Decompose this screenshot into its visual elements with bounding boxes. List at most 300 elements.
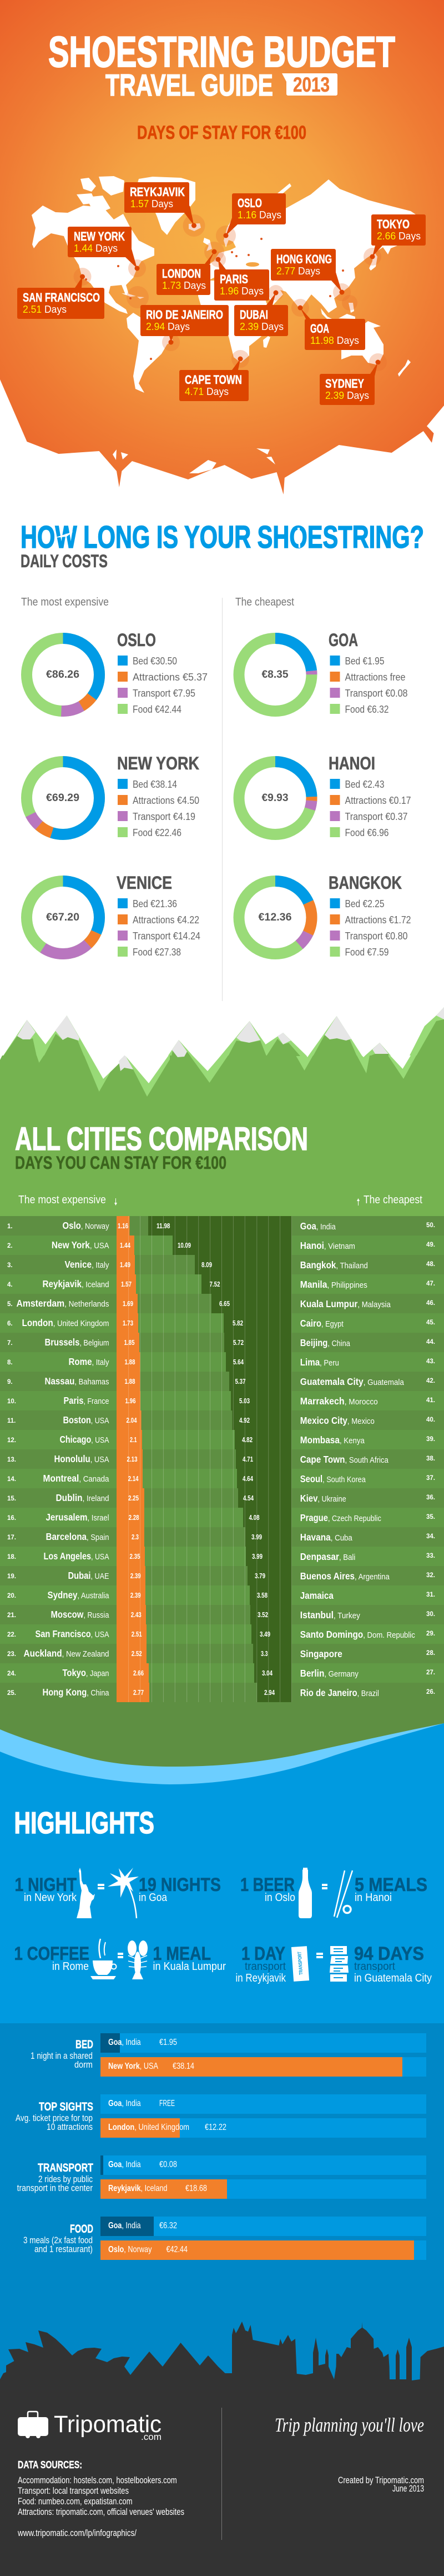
row: New York and Hanoi: 49. bbox=[426, 1242, 435, 1248]
row: San Francisco and Santo Domingo: 3.49 bbox=[260, 1630, 270, 1638]
callout: Cape Town: CAPE TOWN bbox=[185, 373, 242, 387]
highlight: 1 meal in Kuala Lumpur: 1 MEAL bbox=[153, 1943, 211, 1964]
icon: equals sign bbox=[118, 1953, 123, 1958]
row: Sydney and Jamaica: 3.58 bbox=[257, 1591, 268, 1599]
row: Sydney and Jamaica: 20. bbox=[7, 1593, 16, 1599]
comparison: food: Oslo, Norway bbox=[108, 2245, 152, 2254]
icon: equals sign bbox=[98, 1884, 104, 1889]
row: Amsterdam and Kuala Lumpur: Amsterdam, Netherlands bbox=[17, 1298, 109, 1309]
row: Moscow and Istanbul bbox=[0, 1605, 444, 1624]
wave: light blue band bbox=[0, 1717, 444, 1784]
comparison: food bbox=[23, 2217, 426, 2260]
panel: New York daily costs: €69.29 bbox=[46, 792, 79, 804]
subheading: days you can stay: DAYS YOU CAN STAY FOR €100 bbox=[15, 1153, 226, 1173]
row: Amsterdam and Kuala Lumpur: 46. bbox=[426, 1300, 435, 1307]
panel: Goa daily costs bbox=[239, 630, 407, 715]
row: Paris and Marrakech: Marrakech, Morocco bbox=[300, 1395, 378, 1407]
row: Barcelona and Havana: Barcelona, Spain bbox=[46, 1531, 109, 1542]
callout: Hong Kong: 2.77 Days bbox=[276, 266, 320, 277]
row: New York and Hanoi: 10.09 bbox=[178, 1241, 191, 1249]
column label: most expensive: The most expensive bbox=[21, 596, 109, 608]
row: Nassau and Guatemala City: 5.37 bbox=[235, 1377, 245, 1385]
row: Sydney and Jamaica: 31. bbox=[426, 1592, 435, 1598]
panel: Hanoi daily costs: HANOI bbox=[329, 753, 375, 773]
panel: Hanoi daily costs: Bed €2.43 bbox=[345, 779, 384, 790]
row: London and Cairo: 5.82 bbox=[233, 1319, 243, 1327]
row: Venice and Bangkok bbox=[0, 1255, 444, 1274]
subtitle: TRAVEL GUIDE bbox=[105, 68, 273, 102]
row: Oslo and Goa bbox=[0, 1216, 444, 1236]
row: Los Angeles and Denpasar: Los Angeles, USA bbox=[43, 1550, 109, 1562]
panel: Venice daily costs bbox=[27, 873, 200, 958]
row: Brussels and Beijing: Brussels, Belgium bbox=[44, 1337, 109, 1348]
highlight: 1 night in New York: 1 NIGHT bbox=[14, 1874, 77, 1895]
row: Rome and Lima: 5.64 bbox=[233, 1358, 244, 1366]
row: Auckland and Singapore: Auckland, New Zealand bbox=[23, 1648, 109, 1659]
highlight: 5 meals in Hanoi: 5 MEALS bbox=[355, 1874, 427, 1895]
row: New York and Hanoi: Hanoi, Vietnam bbox=[300, 1240, 355, 1251]
row: Jerusalem and Prague: 35. bbox=[426, 1514, 435, 1520]
panel: New York daily costs: Bed €38.14 bbox=[133, 779, 177, 790]
column label: most expensive with arrow: The most expensive bbox=[18, 1194, 106, 1206]
comparison: food: 3 meals (2x fast food bbox=[23, 2235, 93, 2245]
row: Montreal and Seoul: Montreal, Canada bbox=[43, 1473, 109, 1484]
row: Tokyo and Berlin: Berlin, Germany bbox=[300, 1668, 359, 1679]
row: Brussels and Beijing: 1.85 bbox=[124, 1338, 134, 1347]
row: Los Angeles and Denpasar: 18. bbox=[7, 1554, 16, 1560]
row: Rome and Lima: 43. bbox=[426, 1358, 435, 1365]
row: Paris and Marrakech bbox=[0, 1391, 444, 1410]
row: London and Cairo: Cairo, Egypt bbox=[300, 1318, 344, 1329]
row: Amsterdam and Kuala Lumpur: Kuala Lumpur, Malaysia bbox=[300, 1298, 391, 1309]
row: Reykjavik and Manila: 47. bbox=[426, 1281, 435, 1287]
highlight: 19 nights in Goa: 19 NIGHTS bbox=[139, 1874, 221, 1895]
row: Los Angeles and Denpasar: 3.99 bbox=[252, 1552, 263, 1560]
row: San Francisco and Santo Domingo: 22. bbox=[7, 1632, 16, 1638]
comparison: transport bbox=[17, 2155, 426, 2199]
row: Nassau and Guatemala City: Guatemala City, Guatemala bbox=[300, 1376, 404, 1387]
row: Jerusalem and Prague: 16. bbox=[7, 1515, 16, 1522]
callout: Reykjavik: 1.57 Days bbox=[130, 198, 173, 209]
icon: folded transport tickets bbox=[330, 1946, 349, 1982]
row: Dubai and Buenos Aires: 32. bbox=[426, 1572, 435, 1579]
row: Auckland and Singapore: 28. bbox=[426, 1650, 435, 1657]
text block: credit: June 2013 bbox=[392, 2483, 424, 2494]
row: Hong Kong and Rio de Janeiro bbox=[0, 1683, 444, 1702]
callout: San Francisco bbox=[17, 274, 104, 319]
row: San Francisco and Santo Domingo bbox=[0, 1624, 444, 1644]
panel: green comparison background bbox=[0, 1056, 444, 1733]
row: Dublin and Kiev bbox=[0, 1488, 444, 1508]
row: Dubai and Buenos Aires: 19. bbox=[7, 1573, 16, 1580]
row: Dubai and Buenos Aires bbox=[0, 1566, 444, 1585]
callout: Paris: 1.96 Days bbox=[220, 286, 264, 297]
icon: chopsticks and bowl ring bbox=[334, 1870, 352, 1918]
icon: beer bottle bbox=[299, 1868, 312, 1918]
row: Jerusalem and Prague: Jerusalem, Israel bbox=[46, 1512, 109, 1523]
highlight: 5 meals in Hanoi bbox=[355, 1874, 427, 1904]
row: Barcelona and Havana bbox=[0, 1527, 444, 1547]
comparison: food: €42.44 bbox=[167, 2245, 188, 2254]
row: Rome and Lima: 8. bbox=[7, 1359, 13, 1366]
panel: Goa daily costs: Bed €1.95 bbox=[345, 656, 384, 667]
highlight: 1 coffee in Rome bbox=[14, 1943, 89, 1973]
row: New York and Hanoi bbox=[0, 1236, 444, 1255]
row: Boston and Mexico City: 11. bbox=[7, 1418, 16, 1424]
comparison: food: Goa, India bbox=[108, 2221, 141, 2230]
row: Oslo and Goa: 1. bbox=[7, 1223, 13, 1230]
panel: New York daily costs: Attractions €4.50 bbox=[133, 795, 199, 806]
row: Hong Kong and Rio de Janeiro: 25. bbox=[7, 1690, 16, 1697]
row: Oslo and Goa: 50. bbox=[426, 1222, 435, 1229]
row: New York and Hanoi: 2. bbox=[7, 1243, 13, 1249]
logo: Tripomatic: Tripomatic bbox=[54, 2411, 162, 2438]
callout: Sydney: 2.39 Days bbox=[325, 390, 369, 401]
row: Honolulu and Cape Town: 2.13 bbox=[127, 1455, 138, 1463]
heading: days of stay: DAYS OF STAY FOR €100 bbox=[137, 122, 306, 143]
panel: New York daily costs bbox=[27, 753, 199, 838]
panel: Oslo daily costs: Transport €7.95 bbox=[133, 688, 195, 699]
callout: Rio de Janeiro: RIO DE JANEIRO bbox=[146, 308, 223, 322]
logo: Tripomatic: .com bbox=[141, 2432, 162, 2442]
highlight: 1 night in New York bbox=[14, 1874, 77, 1904]
comparison: top sights: TOP SIGHTS bbox=[39, 2100, 93, 2113]
row: Tokyo and Berlin: 2.66 bbox=[133, 1669, 144, 1677]
row: San Francisco and Santo Domingo: 29. bbox=[426, 1630, 435, 1637]
row: Nassau and Guatemala City: 9. bbox=[7, 1379, 13, 1385]
row: Honolulu and Cape Town bbox=[0, 1449, 444, 1469]
panel: Oslo daily costs bbox=[27, 630, 208, 715]
row: Boston and Mexico City: Boston, USA bbox=[63, 1414, 109, 1425]
row: London and Cairo: 6. bbox=[7, 1320, 13, 1327]
panel: New York daily costs: Transport €4.19 bbox=[133, 811, 195, 822]
row: Amsterdam and Kuala Lumpur: 6.65 bbox=[219, 1299, 230, 1308]
comparison: top sights: London, United Kingdom bbox=[108, 2123, 189, 2132]
text block: credit bbox=[338, 2475, 424, 2494]
row: Dubai and Buenos Aires: Buenos Aires, Argentina bbox=[300, 1570, 390, 1582]
row: Amsterdam and Kuala Lumpur: 5. bbox=[7, 1301, 13, 1308]
row: San Francisco and Santo Domingo: Santo Domingo, Dom. Republic bbox=[300, 1629, 415, 1640]
row: Tokyo and Berlin: 24. bbox=[7, 1670, 16, 1677]
icon: palm tree bbox=[108, 1868, 139, 1918]
row: Dublin and Kiev: 36. bbox=[426, 1494, 435, 1501]
panel: Oslo daily costs: €86.26 bbox=[46, 669, 79, 681]
panel: Goa daily costs: Food €6.32 bbox=[345, 704, 389, 715]
row: Oslo and Goa: Oslo, Norway bbox=[62, 1220, 109, 1231]
comparison: top sights: €12.22 bbox=[205, 2123, 226, 2132]
row: Dublin and Kiev: Kiev, Ukraine bbox=[300, 1493, 346, 1504]
icon: Statue of Liberty bbox=[77, 1868, 95, 1918]
highlight: 1 day transport in Reykjavik bbox=[235, 1943, 286, 1984]
highlight: 94 days transport in Guatemala City: 94 DAYS bbox=[354, 1943, 424, 1964]
row: London and Cairo: 45. bbox=[426, 1319, 435, 1326]
row: Reykjavik and Manila: Reykjavik, Iceland bbox=[42, 1278, 109, 1289]
text block: data sources list: Transport: local transport websites bbox=[18, 2485, 129, 2496]
row: Paris and Marrakech: 10. bbox=[7, 1398, 16, 1405]
row: Venice and Bangkok: Venice, Italy bbox=[64, 1259, 109, 1270]
callout: London: LONDON bbox=[162, 267, 201, 281]
row: Auckland and Singapore: Singapore bbox=[300, 1648, 342, 1659]
row: Hong Kong and Rio de Janeiro: Hong Kong, China bbox=[42, 1687, 109, 1698]
comparison: transport: €18.68 bbox=[185, 2184, 207, 2193]
callout: Oslo: OSLO bbox=[238, 196, 262, 210]
icon: transport ticket: TRANSPORT bbox=[296, 1951, 304, 1975]
highlight: 1 night in New York: in New York bbox=[24, 1892, 77, 1904]
callout: London: 1.73 Days bbox=[162, 280, 206, 291]
comparison: top sights bbox=[16, 2094, 426, 2138]
row: Chicago and Mombasa: 2.1 bbox=[130, 1435, 137, 1444]
column label: cheapest: The cheapest bbox=[235, 596, 294, 608]
row: Rome and Lima: 1.88 bbox=[124, 1358, 135, 1366]
row: Los Angeles and Denpasar: 2.35 bbox=[130, 1552, 140, 1560]
illustration: city skyline and dark footer bbox=[0, 2322, 444, 2576]
callout: Tokyo bbox=[370, 214, 426, 259]
row: Chicago and Mombasa bbox=[0, 1430, 444, 1449]
panel: Bangkok daily costs: €12.36 bbox=[259, 912, 292, 923]
row: Jerusalem and Prague bbox=[0, 1508, 444, 1527]
table: all cities comparison bbox=[0, 1216, 444, 1702]
callout: Dubai bbox=[234, 290, 288, 336]
row: Venice and Bangkok: 1.49 bbox=[120, 1261, 130, 1269]
callout: Cape Town bbox=[179, 357, 249, 401]
comparison: top sights: Avg. ticket price for top bbox=[16, 2113, 93, 2123]
row: Moscow and Istanbul: Istanbul, Turkey bbox=[300, 1609, 360, 1620]
icon: equals sign bbox=[316, 1953, 323, 1958]
row: Jerusalem and Prague: 4.08 bbox=[249, 1513, 260, 1522]
panel: Bangkok daily costs: Food €7.59 bbox=[345, 947, 389, 958]
heading: data sources: DATA SOURCES: bbox=[18, 2459, 82, 2470]
row: Brussels and Beijing: Beijing, China bbox=[300, 1337, 350, 1348]
heading: all cities comparison: ALL CITIES COMPARISON bbox=[15, 1121, 308, 1157]
callout: Dubai: 2.39 Days bbox=[240, 321, 284, 332]
comparison: bed: BED bbox=[75, 2038, 93, 2051]
row: Moscow and Istanbul: Moscow, Russia bbox=[51, 1609, 109, 1620]
comparison: top sights: 10 attractions bbox=[47, 2122, 93, 2132]
highlight: 1 beer in Oslo bbox=[240, 1874, 295, 1904]
row: Venice and Bangkok: Bangkok, Thailand bbox=[300, 1259, 368, 1271]
panel: Hanoi daily costs: €9.93 bbox=[262, 792, 289, 804]
callout: New York bbox=[68, 227, 140, 271]
row: New York and Hanoi: New York, USA bbox=[52, 1239, 109, 1251]
row: Nassau and Guatemala City bbox=[0, 1372, 444, 1391]
row: Reykjavik and Manila: 4. bbox=[7, 1282, 13, 1288]
row: Jerusalem and Prague: 2.28 bbox=[129, 1513, 139, 1522]
row: Barcelona and Havana: 17. bbox=[7, 1534, 16, 1541]
comparison: bed: dorm bbox=[74, 2059, 93, 2070]
row: Auckland and Singapore: 23. bbox=[7, 1651, 16, 1658]
row: Auckland and Singapore: 3.3 bbox=[261, 1649, 268, 1658]
comparison: top sights: Goa, India bbox=[108, 2099, 141, 2108]
row: London and Cairo: 1.73 bbox=[123, 1319, 133, 1327]
comparison: transport: €0.08 bbox=[159, 2160, 177, 2169]
callout: Reykjavik: REYKJAVIK bbox=[130, 185, 185, 199]
callout: Tokyo: TOKYO bbox=[377, 217, 410, 231]
year badge: 2013 bbox=[293, 73, 330, 96]
text block: data sources list bbox=[17, 2475, 184, 2538]
highlight: 94 days transport in Guatemala City: transport bbox=[354, 1960, 395, 1973]
comparison: food: €6.32 bbox=[159, 2221, 177, 2230]
panel: Hanoi daily costs: Transport €0.37 bbox=[345, 811, 407, 822]
row: Moscow and Istanbul: 3.52 bbox=[258, 1610, 268, 1619]
comparison: bed: New York, USA bbox=[108, 2062, 158, 2071]
heading: highlights: HIGHLIGHTS bbox=[14, 1805, 154, 1840]
row: Paris and Marrakech: 41. bbox=[426, 1397, 435, 1404]
text block: data sources list: Accommodation: hostels.com, hostelbookers.com bbox=[18, 2475, 177, 2485]
row: Sydney and Jamaica: Jamaica bbox=[300, 1590, 334, 1601]
callout: Goa: GOA bbox=[310, 322, 329, 336]
row: San Francisco and Santo Domingo: 2.51 bbox=[132, 1630, 142, 1638]
panel: Oslo daily costs: Bed €30.50 bbox=[133, 656, 177, 667]
callout: Dubai: DUBAI bbox=[240, 308, 268, 322]
row: Oslo and Goa: 11.98 bbox=[157, 1222, 170, 1230]
panel: New York daily costs: Food €22.46 bbox=[133, 827, 181, 838]
panel: Bangkok daily costs: Attractions €1.72 bbox=[345, 914, 411, 926]
callout: New York: NEW YORK bbox=[74, 229, 125, 243]
highlight: 1 day transport in Reykjavik: transport bbox=[245, 1960, 286, 1973]
callout: Tokyo: 2.66 Days bbox=[377, 231, 421, 242]
comparison: transport: transport in the center bbox=[17, 2183, 93, 2193]
callout: Rio de Janeiro: 2.94 Days bbox=[146, 321, 190, 332]
text block: data sources list: Attractions: tripomatic.com, official venues' websites bbox=[18, 2507, 184, 2517]
row: Paris and Marrakech: 1.96 bbox=[125, 1397, 135, 1405]
highlight: 1 meal in Kuala Lumpur: in Kuala Lumpur bbox=[153, 1960, 226, 1973]
comparison: food: FOOD bbox=[70, 2223, 93, 2235]
column label: cheapest with arrow: The cheapest bbox=[364, 1194, 422, 1206]
panel: Bangkok daily costs bbox=[239, 873, 411, 958]
row: Dublin and Kiev: 4.54 bbox=[243, 1494, 254, 1502]
row: Reykjavik and Manila: Manila, Philippines bbox=[300, 1279, 367, 1290]
row: Tokyo and Berlin: Tokyo, Japan bbox=[62, 1667, 109, 1678]
row: New York and Hanoi: 1.44 bbox=[120, 1241, 131, 1249]
row: Dublin and Kiev: 2.25 bbox=[128, 1494, 139, 1502]
row: Montreal and Seoul: 37. bbox=[426, 1475, 435, 1482]
row: Boston and Mexico City: 2.04 bbox=[127, 1416, 137, 1424]
row: Tokyo and Berlin: 27. bbox=[426, 1669, 435, 1676]
row: Brussels and Beijing: 5.72 bbox=[233, 1338, 244, 1347]
callout: Paris: PARIS bbox=[220, 272, 248, 286]
callout: New York: 1.44 Days bbox=[74, 243, 118, 254]
row: Nassau and Guatemala City: 42. bbox=[426, 1378, 435, 1384]
callout: Rio de Janeiro bbox=[140, 305, 229, 344]
row: Sydney and Jamaica: Sydney, Australia bbox=[48, 1589, 109, 1600]
row: San Francisco and Santo Domingo: San Francisco, USA bbox=[36, 1628, 109, 1639]
row: Moscow and Istanbul: 30. bbox=[426, 1611, 435, 1618]
row: Honolulu and Cape Town: Cape Town, South Africa bbox=[300, 1454, 389, 1465]
panel: Bangkok daily costs: BANGKOK bbox=[329, 873, 402, 893]
row: Dubai and Buenos Aires: 3.79 bbox=[255, 1572, 265, 1580]
panel: Oslo daily costs: Attractions €5.37 bbox=[133, 672, 208, 683]
row: Montreal and Seoul: 2.14 bbox=[128, 1474, 139, 1483]
row: Montreal and Seoul: 14. bbox=[7, 1476, 16, 1483]
row: Dublin and Kiev: Dublin, Ireland bbox=[56, 1492, 109, 1503]
comparison: bed: €1.95 bbox=[159, 2038, 177, 2047]
callout: Paris bbox=[214, 257, 269, 301]
row: Honolulu and Cape Town: 13. bbox=[7, 1457, 16, 1463]
row: Hong Kong and Rio de Janeiro: Rio de Janeiro, Brazil bbox=[300, 1687, 379, 1698]
row: Chicago and Mombasa: 39. bbox=[426, 1436, 435, 1443]
callout: San Francisco: 2.51 Days bbox=[23, 304, 67, 315]
highlight: 1 meal in Kuala Lumpur bbox=[153, 1943, 226, 1973]
panel: Bangkok daily costs: Transport €0.80 bbox=[345, 931, 407, 942]
comparison: bed bbox=[31, 2033, 426, 2077]
row: Los Angeles and Denpasar: 33. bbox=[426, 1553, 435, 1559]
row: Honolulu and Cape Town: Honolulu, USA bbox=[54, 1453, 109, 1464]
icon: equals sign bbox=[322, 1884, 327, 1889]
callout: Oslo: 1.16 Days bbox=[238, 209, 281, 221]
row: Montreal and Seoul: 4.64 bbox=[243, 1474, 254, 1483]
row: Brussels and Beijing: 44. bbox=[426, 1339, 435, 1345]
row: Amsterdam and Kuala Lumpur bbox=[0, 1294, 444, 1313]
row: Chicago and Mombasa: Chicago, USA bbox=[60, 1434, 109, 1445]
callout: Hong Kong bbox=[271, 249, 344, 294]
row: Brussels and Beijing: 7. bbox=[7, 1340, 13, 1347]
text block: data sources list: www.tripomatic.com/lp/infographics/ bbox=[17, 2528, 137, 2538]
row: Barcelona and Havana: 34. bbox=[426, 1533, 435, 1540]
panel: Bangkok daily costs: Bed €2.25 bbox=[345, 898, 384, 909]
row: Boston and Mexico City: 40. bbox=[426, 1417, 435, 1423]
row: Moscow and Istanbul: 21. bbox=[7, 1612, 16, 1619]
row: Los Angeles and Denpasar bbox=[0, 1547, 444, 1566]
row: Barcelona and Havana: Havana, Cuba bbox=[300, 1532, 352, 1543]
callout: Goa: 11.98 Days bbox=[310, 335, 359, 346]
panel: Venice daily costs: Attractions €4.22 bbox=[133, 914, 199, 926]
row: Boston and Mexico City bbox=[0, 1410, 444, 1430]
row: Oslo and Goa: 1.16 bbox=[118, 1222, 128, 1230]
panel: Hanoi daily costs bbox=[239, 753, 411, 838]
row: Reykjavik and Manila: 1.57 bbox=[121, 1280, 132, 1288]
row: Tokyo and Berlin: 3.04 bbox=[262, 1669, 273, 1677]
world map bbox=[32, 176, 419, 393]
row: Honolulu and Cape Town: 38. bbox=[426, 1455, 435, 1462]
row: Amsterdam and Kuala Lumpur: 1.69 bbox=[123, 1299, 133, 1308]
row: Moscow and Istanbul: 2.43 bbox=[131, 1610, 142, 1619]
panel: Goa daily costs: Transport €0.08 bbox=[345, 688, 407, 699]
row: Nassau and Guatemala City: Nassau, Bahamas bbox=[44, 1375, 109, 1387]
row: Montreal and Seoul: Seoul, South Korea bbox=[300, 1473, 366, 1484]
row: Tokyo and Berlin bbox=[0, 1663, 444, 1683]
row: Paris and Marrakech: Paris, France bbox=[63, 1395, 109, 1406]
comparison: food: and 1 restaurant) bbox=[34, 2244, 93, 2254]
icon: coffee cup bbox=[90, 1939, 117, 1979]
highlight: 1 beer in Oslo: 1 BEER bbox=[240, 1874, 295, 1895]
panel: Venice daily costs: VENICE bbox=[117, 873, 172, 893]
highlight: 1 day transport in Reykjavik: in Reykjavik bbox=[235, 1972, 286, 1984]
logo: Tripomatic bbox=[18, 2411, 162, 2442]
comparison: transport: Goa, India bbox=[108, 2160, 141, 2169]
row: Paris and Marrakech: 5.03 bbox=[239, 1397, 250, 1405]
callout: Reykjavik bbox=[124, 182, 196, 228]
row: Dubai and Buenos Aires: Dubai, UAE bbox=[68, 1570, 109, 1581]
row: Boston and Mexico City: Mexico City, Mexico bbox=[300, 1415, 375, 1426]
callout: San Francisco: SAN FRANCISCO bbox=[23, 291, 100, 304]
row: Brussels and Beijing bbox=[0, 1333, 444, 1352]
comparison: transport: Reykjavik, Iceland bbox=[108, 2184, 168, 2193]
callout: Cape Town: 4.71 Days bbox=[185, 386, 229, 397]
icon: lobster bbox=[128, 1940, 148, 1979]
highlight: 1 day transport in Reykjavik: 1 DAY bbox=[241, 1943, 285, 1964]
panel: Venice daily costs: Bed €21.36 bbox=[133, 898, 177, 909]
callout: London bbox=[157, 249, 216, 295]
panel: Goa daily costs: €8.35 bbox=[262, 669, 289, 681]
panel: Oslo daily costs: OSLO bbox=[117, 630, 156, 650]
row: Rome and Lima bbox=[0, 1352, 444, 1372]
highlight: 1 coffee in Rome: 1 COFFEE bbox=[14, 1943, 89, 1964]
row: Reykjavik and Manila: 7.52 bbox=[210, 1280, 220, 1288]
highlight: 1 coffee in Rome: in Rome bbox=[52, 1960, 89, 1973]
row: Venice and Bangkok: 8.09 bbox=[201, 1261, 212, 1269]
row: Jerusalem and Prague: Prague, Czech Republic bbox=[300, 1512, 381, 1523]
panel: Goa daily costs: Attractions free bbox=[345, 672, 405, 683]
